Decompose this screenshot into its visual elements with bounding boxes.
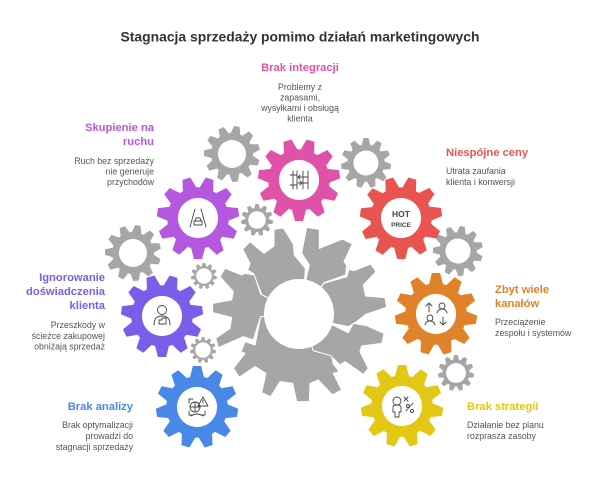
label: zbyt wiele kanałów: zespołu i systemów xyxy=(495,328,572,338)
gear: brak strategii xyxy=(360,365,444,447)
label: brak integracji: zapasami, xyxy=(280,92,320,102)
tiny gray gear: left upper xyxy=(191,263,217,289)
label: brak analizy: Brak optymalizacji xyxy=(62,420,133,430)
label: brak analizy: prowadzi do xyxy=(86,431,133,441)
label: ignorowanie doświadczenia klienta: Ignorowanie xyxy=(39,272,105,284)
label: brak strategii: Brak strategii xyxy=(467,401,539,413)
icon: hot price: PRICE xyxy=(391,222,412,229)
label: ignorowanie doświadczenia klienta xyxy=(26,272,106,352)
label: ignorowanie doświadczenia klienta: ścieżce zakupowej xyxy=(32,331,105,341)
tiny gray gear: left lower xyxy=(190,337,216,363)
gear: zbyt wiele kanałów xyxy=(394,273,478,355)
label: brak strategii: rozprasza zasoby xyxy=(467,431,537,441)
icon: analysis warning xyxy=(189,397,208,416)
label: brak integracji: Brak integracji xyxy=(261,62,339,74)
label: brak integracji: wysyłkami i obsługą xyxy=(260,103,339,113)
label: skupienie na ruchu: Skupienie na xyxy=(85,122,155,134)
small gray gear: top left xyxy=(199,121,265,187)
label: brak strategii: Działanie bez planu xyxy=(467,420,544,430)
gear: brak integracji xyxy=(257,139,341,221)
label: niespójne ceny xyxy=(446,147,529,187)
icon: hot price xyxy=(391,209,412,229)
icon: integration blocks xyxy=(290,171,308,189)
label: brak integracji xyxy=(260,62,339,124)
label: skupienie na ruchu: przychodów xyxy=(107,177,155,187)
label: niespójne ceny: klienta i konwersji xyxy=(446,177,515,187)
label: ignorowanie doświadczenia klienta: obniżają sprzedaż xyxy=(34,342,105,352)
icon: people with arrows xyxy=(425,303,447,325)
label: ignorowanie doświadczenia klienta: Przeszkody w xyxy=(51,320,106,330)
central broken gear xyxy=(213,227,387,402)
tiny gray gear: centre top xyxy=(241,204,273,236)
gear: ignorowanie doświadczenia klienta xyxy=(120,275,204,357)
icon: person with strategy marks xyxy=(393,397,414,417)
label: brak analizy: stagnacji sprzedaży xyxy=(56,442,134,452)
small gray gear: top right xyxy=(341,138,391,188)
label: zbyt wiele kanałów xyxy=(495,284,572,338)
title: Stagnacja sprzedaży pomimo działań marketingowych xyxy=(121,28,479,44)
label: brak analizy: Brak analizy xyxy=(68,401,134,413)
label: zbyt wiele kanałów: Przeciążenie xyxy=(495,317,545,327)
label: ignorowanie doświadczenia klienta: klienta xyxy=(70,300,106,312)
label: skupienie na ruchu: Ruch bez sprzedaży xyxy=(74,156,155,166)
label: ignorowanie doświadczenia klienta: doświadczenia xyxy=(26,286,106,298)
small gray gear: right xyxy=(429,222,487,280)
label: brak integracji: Problemy z xyxy=(278,82,322,92)
label: skupienie na ruchu: nie generuje xyxy=(106,166,154,176)
icon: road with car xyxy=(190,209,206,227)
label: niespójne ceny: Niespójne ceny xyxy=(446,147,529,159)
label: brak strategii xyxy=(467,401,544,441)
icon: customer xyxy=(154,306,170,325)
label: zbyt wiele kanałów: kanałów xyxy=(495,298,539,310)
gear: niespójne ceny xyxy=(350,167,452,269)
label: skupienie na ruchu xyxy=(74,122,155,187)
label: brak integracji: klienta xyxy=(287,114,313,124)
gear: skupienie na ruchu xyxy=(156,177,240,259)
gear: brak analizy xyxy=(155,366,239,448)
label: zbyt wiele kanałów: Zbyt wiele xyxy=(495,284,549,296)
icon: hot price: HOT xyxy=(392,209,411,219)
label: niespójne ceny: Utrata zaufania xyxy=(446,166,506,176)
label: brak analizy xyxy=(56,401,134,452)
tiny gray gear: lower right xyxy=(438,355,474,391)
small gray gear: left xyxy=(100,220,166,286)
label: skupienie na ruchu: ruchu xyxy=(123,136,154,148)
